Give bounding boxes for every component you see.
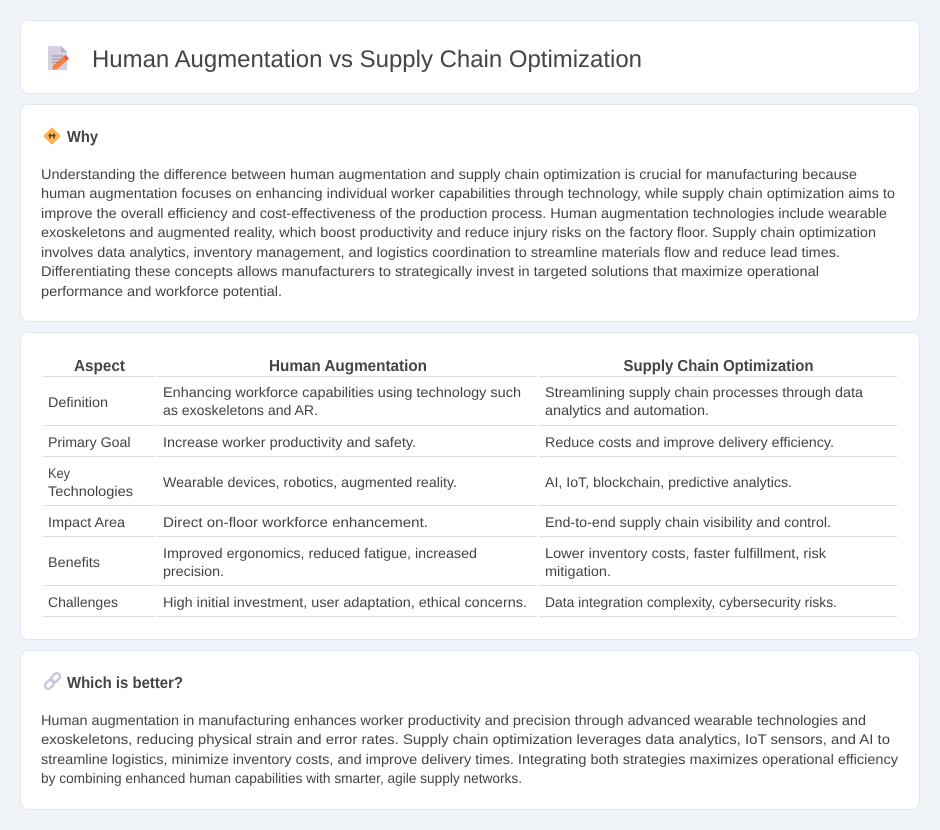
panel: why bbox=[20, 104, 920, 322]
row: definition: Definition bbox=[48, 394, 108, 410]
text block: why paragraph: human augmentation focuses on enhancing individual worker capabilities through technology, while supply chain optimization aims to bbox=[41, 185, 895, 201]
table header row: Human Augmentation bbox=[269, 358, 427, 375]
row: impact area: Direct on-floor workforce enhancement. bbox=[163, 514, 428, 530]
row: definition: as exoskeletons and AR. bbox=[163, 402, 318, 418]
table header row: Supply Chain Optimization bbox=[624, 358, 814, 375]
text block: which is better paragraph bbox=[41, 712, 898, 786]
text block: which is better paragraph: by combining enhanced human capabilities with smarter, agile supply networks. bbox=[41, 770, 522, 786]
row: definition: analytics and automation. bbox=[545, 402, 709, 418]
row: challenges: Challenges bbox=[48, 594, 118, 610]
row: key technologies: Key bbox=[48, 465, 70, 481]
icon: document with pencil bbox=[48, 46, 69, 70]
row: definition bbox=[48, 384, 863, 418]
text block: why paragraph bbox=[41, 166, 895, 299]
row: primary goal bbox=[48, 434, 834, 450]
panel: which is better bbox=[20, 650, 920, 810]
text block: which is better paragraph: streamline logistics, minimize inventory costs, and improve delivery times. Integrating both strategies maximizes operational efficiency bbox=[41, 751, 898, 767]
row: benefits bbox=[48, 545, 827, 579]
icon: link bbox=[44, 672, 61, 690]
row: impact area bbox=[48, 514, 831, 530]
row: challenges: High initial investment, user adaptation, ethical concerns. bbox=[163, 594, 527, 610]
text block: which is better paragraph: exoskeletons, reducing physical strain and error rates. Supply chain optimization leverages data analytics, IoT sensors, and AI to bbox=[41, 731, 890, 747]
text block: why paragraph: Differentiating these concepts allows manufacturers to strategically invest in targeted solutions that maximize operational bbox=[41, 263, 819, 279]
row: primary goal: Reduce costs and improve delivery efficiency. bbox=[545, 434, 834, 450]
row: benefits: Lower inventory costs, faster fulfillment, risk bbox=[545, 545, 827, 561]
text block: why paragraph: performance and workforce potential. bbox=[41, 283, 282, 299]
row: primary goal: Increase worker productivity and safety. bbox=[163, 434, 416, 450]
icon: warning diamond bbox=[44, 128, 60, 144]
text block: which is better paragraph: Human augmentation in manufacturing enhances worker productivity and precision through advanced wearable technologies and bbox=[41, 712, 866, 728]
row: challenges: Data integration complexity, cybersecurity risks. bbox=[545, 594, 837, 610]
row: definition: Streamlining supply chain processes through data bbox=[545, 384, 863, 400]
text block: why paragraph: exoskeletons and augmented reality, which boost productivity and reduce injury risks on the factory floor. Supply chain optimization bbox=[41, 224, 876, 240]
row: impact area: End-to-end supply chain visibility and control. bbox=[545, 514, 831, 530]
row: impact area: Impact Area bbox=[48, 514, 125, 530]
text block: why paragraph: involves data analytics, inventory management, and logistics coordination to streamline materials flow and reduce lead times. bbox=[41, 244, 840, 260]
row: benefits: mitigation. bbox=[545, 563, 611, 579]
heading: which is better: Which is better? bbox=[67, 675, 183, 692]
heading: why: Why bbox=[67, 129, 98, 146]
row: benefits: Benefits bbox=[48, 554, 100, 570]
panel: comparison table bbox=[20, 332, 920, 640]
title: Human Augmentation vs Supply Chain Optimization bbox=[92, 46, 642, 73]
text block: why paragraph: Understanding the difference between human augmentation and supply chain optimization is crucial for manufacturing because bbox=[41, 166, 857, 182]
row: challenges bbox=[48, 594, 837, 610]
table header row: Aspect bbox=[74, 358, 126, 375]
row: key technologies bbox=[48, 465, 792, 499]
row: definition: Enhancing workforce capabilities using technology such bbox=[163, 384, 521, 400]
row: benefits: Improved ergonomics, reduced fatigue, increased bbox=[163, 545, 477, 561]
row: benefits: precision. bbox=[163, 563, 224, 579]
row: key technologies: AI, IoT, blockchain, predictive analytics. bbox=[545, 474, 792, 490]
row: key technologies: Technologies bbox=[48, 483, 133, 499]
row: key technologies: Wearable devices, robotics, augmented reality. bbox=[163, 474, 457, 490]
table header row bbox=[74, 358, 814, 375]
panel: header bbox=[20, 20, 920, 94]
text block: why paragraph: improve the overall efficiency and cost-effectiveness of the production process. Human augmentation technologies include wearable bbox=[41, 205, 887, 221]
row: primary goal: Primary Goal bbox=[48, 434, 130, 450]
